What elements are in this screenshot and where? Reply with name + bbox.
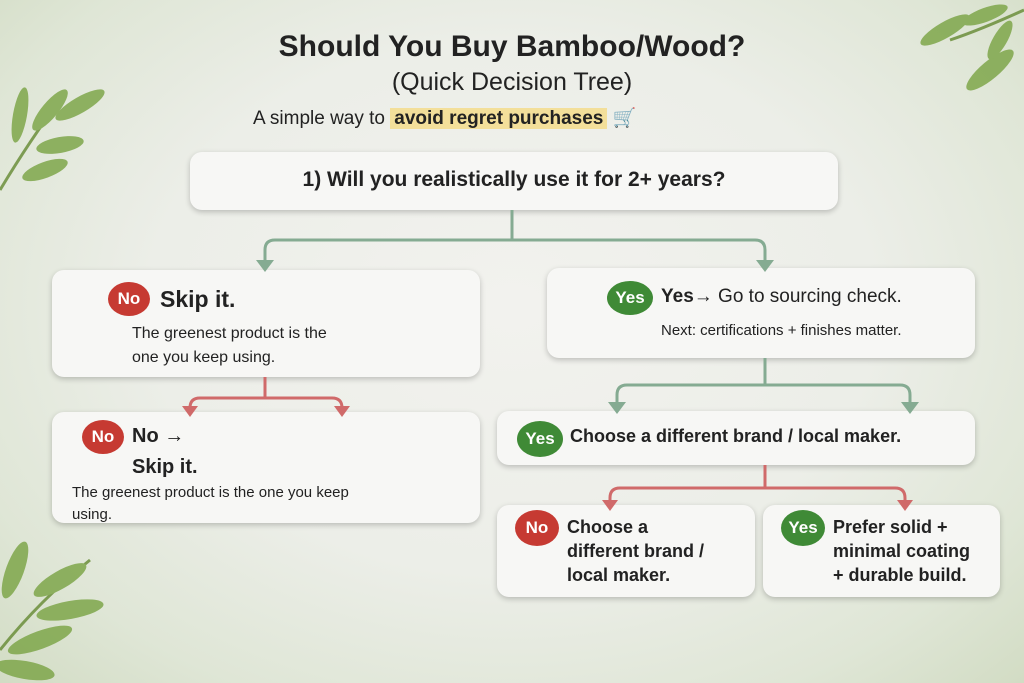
panel: yes solid: + durable build. <box>833 565 967 585</box>
panel: no brand: local maker. <box>567 565 670 585</box>
panel: no skip 2: No → <box>132 425 184 447</box>
panel: yes brand: Choose a different brand / local maker. <box>570 426 901 446</box>
panel: no brand <box>497 505 755 597</box>
panel: yes sourcing: Next: certifications + finishes matter. <box>661 322 902 339</box>
badge yes <box>607 281 653 315</box>
panel: no skip: The greenest product is the <box>132 325 327 342</box>
badge no: No <box>526 518 548 537</box>
panel: no skip 2: using. <box>72 506 112 523</box>
badge yes: Yes <box>615 288 645 307</box>
panel: no brand: different brand / <box>567 541 704 561</box>
badge no: No <box>118 289 140 308</box>
panel: yes solid: Prefer solid + <box>833 517 948 537</box>
panel: no skip 2: Skip it. <box>132 456 198 478</box>
panel: yes solid <box>763 505 1000 597</box>
question box <box>190 152 838 210</box>
panel: no brand: Choose a <box>567 517 648 537</box>
tagline: A simple way to avoid regret purchases 🛒 <box>253 108 636 129</box>
badge yes <box>517 421 563 457</box>
badge yes: Yes <box>525 429 555 448</box>
badge no <box>515 510 559 546</box>
badge yes <box>781 510 825 546</box>
panel: no skip: Skip it. <box>160 286 235 312</box>
badge no <box>108 282 150 316</box>
panel: yes sourcing <box>547 268 975 358</box>
badge no: No <box>92 427 114 446</box>
subtitle: (Quick Decision Tree) <box>392 68 632 96</box>
panel: no skip <box>52 270 480 377</box>
panel: no skip: one you keep using. <box>132 349 275 366</box>
panel: no skip 2: The greenest product is the one you keep <box>72 484 349 501</box>
panel: no skip 2 <box>52 412 480 523</box>
panel: yes solid: minimal coating <box>833 541 970 561</box>
panel: yes sourcing: Yes→ Go to sourcing check. <box>661 286 902 307</box>
badge yes: Yes <box>788 518 818 537</box>
question box: 1) Will you realistically use it for 2+ years? <box>303 168 725 191</box>
badge no <box>82 420 124 454</box>
title: Should You Buy Bamboo/Wood? <box>279 30 745 63</box>
panel: yes brand <box>497 411 975 465</box>
